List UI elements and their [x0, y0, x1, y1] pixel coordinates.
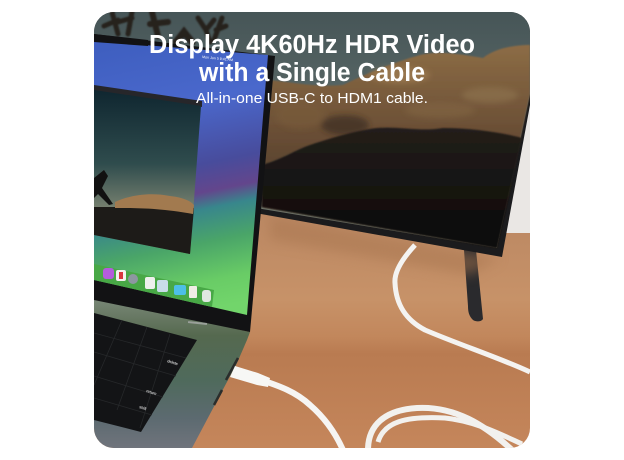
title: with a Single Cable	[198, 59, 425, 87]
laptop lid	[94, 34, 275, 332]
dock	[94, 264, 214, 307]
key labels: shift	[139, 404, 148, 411]
laptop wallpaper	[94, 41, 268, 315]
monitor stand	[464, 250, 483, 321]
keyboard	[94, 313, 197, 432]
key labels: delete	[167, 358, 179, 367]
dock icons	[103, 268, 114, 279]
monitor bezel	[94, 12, 530, 257]
keys	[94, 320, 186, 428]
usb-c connector	[230, 366, 270, 387]
monitor dark foreground rocks	[262, 128, 522, 248]
rock highlights	[320, 65, 516, 136]
monitor screen sky	[94, 12, 530, 248]
monitor	[94, 12, 530, 257]
monitor screen rocks	[262, 45, 530, 248]
key labels: return	[146, 388, 157, 396]
window title bar	[94, 85, 202, 107]
laptop deck	[94, 298, 250, 448]
subtitle: All-in-one USB-C to HDM1 cable.	[196, 90, 428, 107]
monitor cable	[395, 245, 530, 372]
photo horizon rocks	[115, 194, 194, 214]
laptop side port edge	[214, 358, 238, 405]
photo panel	[94, 12, 530, 450]
menu bar status: Mon Jun 5 9:41 AM	[202, 55, 233, 62]
wall	[506, 106, 530, 233]
usb-c cable	[230, 366, 343, 450]
notch bar	[94, 34, 148, 46]
title	[149, 31, 475, 87]
infographic scene	[94, 12, 530, 448]
hinge	[188, 321, 207, 325]
key labels	[139, 358, 179, 411]
joshua trees	[104, 12, 226, 42]
tiny tree	[94, 170, 113, 205]
coiled cable	[368, 408, 522, 450]
photo foreground	[94, 203, 194, 254]
window on laptop	[94, 85, 202, 254]
night photo	[94, 90, 201, 254]
title: Display 4K60Hz HDR Video	[149, 31, 475, 59]
wooden desk	[94, 200, 530, 448]
monitor shadow	[274, 222, 484, 280]
